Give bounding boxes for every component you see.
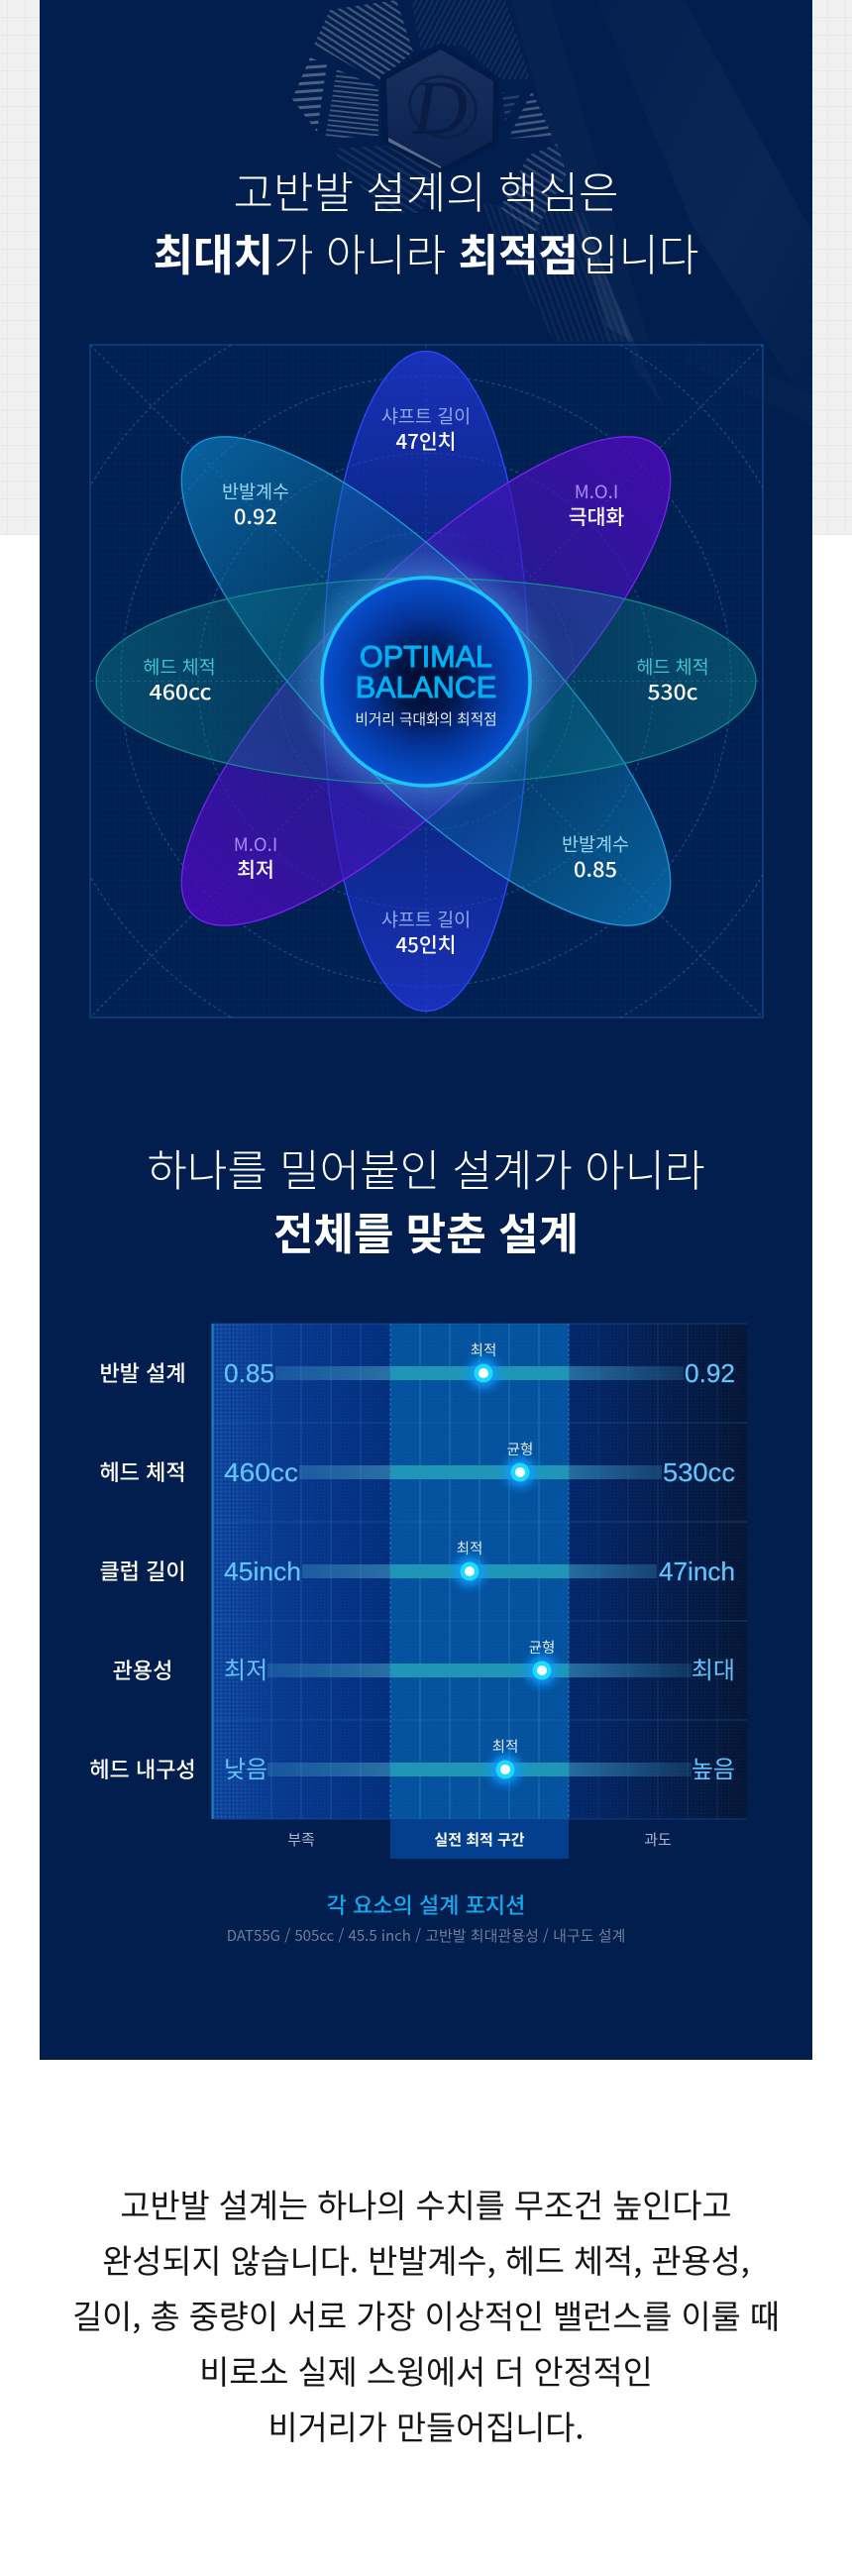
title: core of high-rebound design bbox=[154, 158, 698, 283]
row: head durability: 헤드 내구성 bbox=[89, 1753, 196, 1784]
title: core of high-rebound design: 고반발 설계의 핵심은 bbox=[234, 158, 618, 221]
label: head volume 530c bbox=[636, 654, 709, 705]
label: head volume 530c: 530c bbox=[648, 676, 698, 705]
row: COR design: 0.92 bbox=[685, 1358, 735, 1388]
row: head volume: 530cc bbox=[663, 1457, 735, 1487]
label: head volume 460cc: 460cc bbox=[149, 676, 212, 705]
label: shaft length 47: 47인치 bbox=[395, 425, 457, 455]
row: head volume bbox=[99, 1439, 735, 1487]
row: club length: 47inch bbox=[659, 1556, 735, 1586]
row: forgiveness: 균형 bbox=[529, 1637, 555, 1658]
caption: position heading and spec line bbox=[227, 1888, 625, 1946]
row: COR design: 최적 bbox=[471, 1340, 496, 1360]
row: head durability: 낮음 bbox=[224, 1750, 267, 1784]
ellipse: head volume teal bbox=[96, 579, 756, 785]
center: optimal balance circle: BALANCE bbox=[356, 671, 496, 704]
row: club length: 45inch bbox=[224, 1556, 301, 1586]
label: COR 0.85 bbox=[562, 831, 629, 883]
row: head volume: 460cc bbox=[224, 1457, 298, 1487]
label: MOI max: M.O.I bbox=[575, 479, 618, 504]
row: club length: 최적 bbox=[457, 1538, 482, 1558]
body text: closing paragraph: 비로소 실제 스윙에서 더 안정적인 bbox=[199, 2347, 653, 2394]
label: COR 0.92 bbox=[222, 479, 289, 530]
caption: position heading and spec line: DAT55G / 505cc / 45.5 inch / 고반발 최대관용성 / 내구도 설계 bbox=[227, 1925, 625, 1946]
label: COR 0.92: 반발계수 bbox=[222, 479, 289, 504]
row: club length: 클럽 길이 bbox=[99, 1555, 186, 1586]
label: head volume 460cc: 헤드 체적 bbox=[143, 654, 216, 680]
label: shaft length 45: 샤프트 길이 bbox=[381, 907, 471, 932]
center: optimal balance circle: OPTIMAL bbox=[360, 640, 492, 674]
label: shaft length 47 bbox=[381, 403, 471, 455]
axis: zone labels: 부족 bbox=[287, 1829, 315, 1850]
axis: zone labels bbox=[287, 1819, 672, 1859]
body text: closing paragraph: 비거리가 만들어집니다. bbox=[267, 2403, 585, 2449]
label: head volume 460cc bbox=[143, 654, 216, 705]
row: head durability: 높음 bbox=[692, 1750, 735, 1784]
label: MOI max bbox=[569, 479, 624, 530]
label: MOI min: M.O.I bbox=[234, 831, 277, 857]
row: COR design: 반발 설계 bbox=[99, 1356, 186, 1388]
title: core of high-rebound design: 최대치가 아니라 최적점입니다 bbox=[154, 220, 698, 283]
row: head volume: 헤드 체적 bbox=[99, 1455, 186, 1487]
row: forgiveness: 최대 bbox=[692, 1651, 735, 1685]
caption: position heading and spec line: 각 요소의 설계 포지션 bbox=[327, 1888, 525, 1920]
body text: closing paragraph: 길이, 총 중량이 서로 가장 이상적인 밸런스를 이룰 때 bbox=[72, 2292, 780, 2338]
label: COR 0.85: 반발계수 bbox=[562, 831, 629, 857]
ellipse: COR cyan bbox=[120, 375, 732, 988]
axis: zone labels: 과도 bbox=[644, 1829, 672, 1850]
row: head durability bbox=[89, 1736, 735, 1784]
row: COR design bbox=[99, 1340, 735, 1388]
ellipse: M.O.I violet bbox=[120, 375, 732, 988]
ellipse: shaft length blue bbox=[323, 351, 529, 1011]
label: head volume 530c: 헤드 체적 bbox=[636, 654, 709, 680]
label: shaft length 47: 샤프트 길이 bbox=[381, 403, 471, 429]
label: COR 0.92: 0.92 bbox=[234, 500, 277, 530]
body text: closing paragraph: 고반발 설계는 하나의 수치를 무조건 높인다고 bbox=[120, 2181, 732, 2227]
background: grey grid strip bbox=[0, 0, 852, 535]
row: forgiveness bbox=[113, 1637, 735, 1685]
label: COR 0.85: 0.85 bbox=[574, 853, 617, 883]
chart background zones bbox=[212, 1324, 747, 1819]
heading: whole balance design: 전체를 맞춘 설계 bbox=[273, 1199, 579, 1262]
header artwork: faded club face with hexagon logo bbox=[292, 0, 812, 426]
label: MOI min: 최저 bbox=[237, 853, 274, 883]
diagram: optimal balance atom bbox=[89, 344, 764, 1019]
center: optimal balance circle bbox=[295, 551, 557, 812]
label: MOI max: 극대화 bbox=[569, 500, 624, 530]
heading: whole balance design bbox=[147, 1135, 705, 1262]
label: shaft length 45 bbox=[381, 907, 471, 958]
chart: design position ranges bbox=[89, 1324, 747, 1859]
body text: closing paragraph bbox=[72, 2181, 780, 2449]
label: shaft length 45: 45인치 bbox=[395, 928, 457, 958]
row: forgiveness: 관용성 bbox=[113, 1654, 172, 1685]
panel: navy infographic bbox=[38, 0, 814, 2060]
row: head durability: 최적 bbox=[492, 1736, 518, 1757]
body text: closing paragraph: 완성되지 않습니다. 반발계수, 헤드 체적, 관용성, bbox=[102, 2236, 750, 2283]
heading: whole balance design: 하나를 밀어붙인 설계가 아니라 bbox=[147, 1135, 705, 1199]
row: forgiveness: 최저 bbox=[224, 1651, 267, 1685]
row: club length bbox=[99, 1538, 735, 1586]
label: MOI min bbox=[234, 831, 277, 883]
axis: zone labels: 실전 최적 구간 bbox=[434, 1829, 525, 1850]
center: optimal balance circle: 비거리 극대화의 최적점 bbox=[355, 708, 497, 729]
row: head volume: 균형 bbox=[507, 1439, 533, 1459]
header artwork: faded club face with hexagon logo: D bbox=[411, 64, 468, 151]
row: COR design: 0.85 bbox=[224, 1358, 274, 1388]
